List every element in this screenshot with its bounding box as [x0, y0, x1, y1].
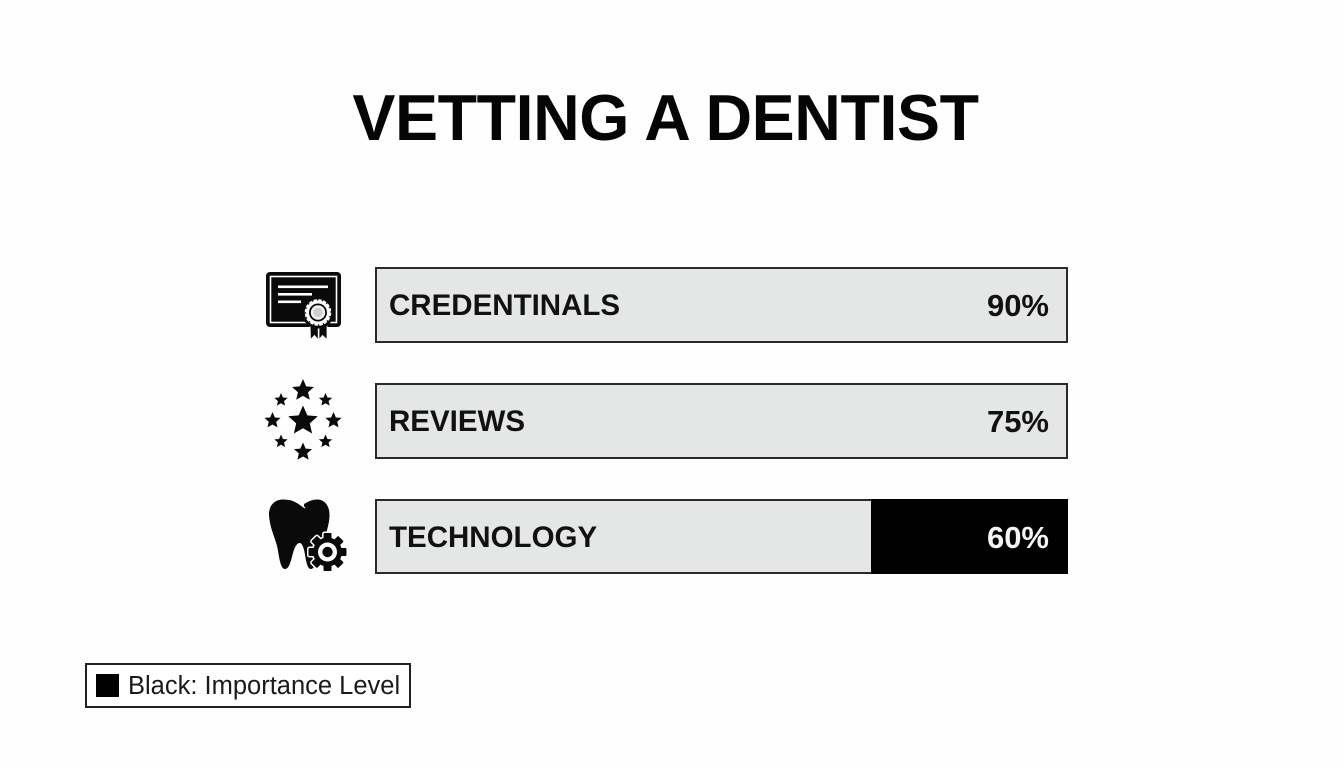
label: technology: TECHNOLOGY	[389, 521, 597, 554]
value: 90%: 90%	[987, 288, 1049, 323]
bar: credentials	[375, 267, 1068, 343]
icon: ring of stars	[264, 379, 342, 460]
icon: certificate with ribbon seal	[266, 272, 341, 339]
icon: tooth with gear	[269, 500, 346, 571]
bar: technology	[375, 499, 1068, 574]
legend	[85, 663, 411, 708]
legend swatch	[96, 674, 119, 697]
bar: reviews	[375, 383, 1068, 459]
legend text: Black: Importance Level	[128, 672, 400, 700]
label: credentials: CREDENTINALS	[389, 289, 620, 322]
value: 60%: 60%	[987, 520, 1049, 555]
value: 75%: 75%	[987, 404, 1049, 439]
label: reviews: REVIEWS	[389, 405, 525, 438]
title: VETTING A DENTIST	[352, 82, 979, 154]
black importance fill	[871, 499, 1068, 574]
